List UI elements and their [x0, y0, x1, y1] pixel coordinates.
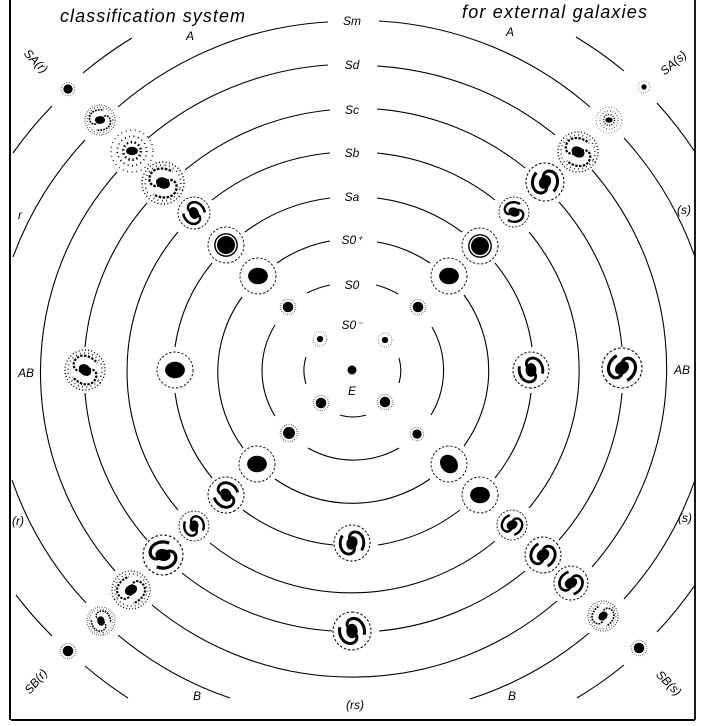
galaxies: upper right diagonal [378, 81, 650, 347]
galaxies: lower left diagonal [60, 395, 329, 659]
family and variety labels: (s) [677, 203, 691, 217]
family and variety labels: SB(r) [22, 666, 50, 697]
family and variety labels: (r) [12, 514, 24, 528]
family and variety labels: B [508, 689, 516, 703]
family and variety labels: SB(s) [653, 668, 684, 699]
family and variety labels: A [185, 29, 194, 43]
family and variety labels: r [18, 208, 23, 222]
family and variety labels: (rs) [346, 698, 364, 712]
axis labels: stage sequence: Sm [343, 14, 361, 28]
axis labels: stage sequence: Sd [345, 58, 360, 72]
family and variety labels: (s) [678, 511, 692, 525]
family and variety labels: SA(s) [657, 48, 689, 78]
family and variety labels: A [505, 25, 514, 39]
axis labels: stage sequence: Sb [345, 146, 360, 160]
family and variety labels: AB [673, 363, 690, 377]
galaxies: bottom axis [329, 520, 375, 650]
axis labels: stage sequence: E [348, 384, 357, 398]
axis labels: stage sequence: Sa [345, 190, 360, 204]
axis labels: stage sequence: S0⁺ [341, 233, 364, 247]
title: classification system: classification system [60, 6, 245, 26]
family and variety labels: AB [17, 366, 34, 380]
axis labels: stage sequence: S0 [345, 278, 360, 292]
title: for external galaxies: for external galaxies [462, 2, 647, 22]
axis labels: stage sequence: S0⁻ [341, 318, 364, 332]
axis labels: stage sequence: Sc [345, 103, 359, 117]
galaxies: upper left diagonal [61, 82, 327, 346]
axis labels: stage sequence [341, 14, 364, 398]
galaxy: central elliptical E [348, 366, 356, 374]
galaxies: horizontal axis [57, 340, 650, 398]
family and variety labels: B [193, 689, 201, 703]
galaxies: lower right diagonal [377, 394, 647, 656]
family and variety labels: SA(r) [21, 46, 51, 76]
